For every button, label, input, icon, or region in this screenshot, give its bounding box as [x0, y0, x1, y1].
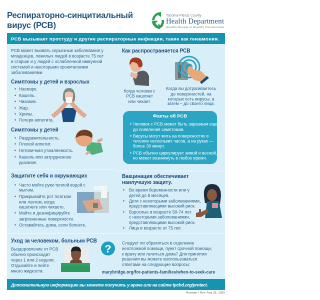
text: when to seek care: к врачу или лечиться дома? Для принятия	[122, 252, 207, 256]
panel: symptoms in infants: Кашель или затрудненное	[19, 154, 72, 160]
intro text: системой и некоторыми хроническими	[11, 64, 89, 70]
panel: symptoms in infants: •	[14, 136, 16, 140]
text: when to seek care: ответами на следующие вопросы:	[122, 262, 190, 267]
icon: baby	[76, 130, 103, 155]
caption: touching surfaces: Когда вы дотрагиваетесь	[166, 86, 217, 91]
divider	[7, 168, 116, 170]
panel: protect yourself: Прикрывайте рот платком	[19, 194, 71, 199]
panel: symptoms in infants	[11, 126, 103, 165]
panel: how RSV spreads	[122, 49, 217, 106]
panel: symptoms in children and adults: •	[14, 106, 16, 110]
panel: protect yourself: или локтем, когда	[19, 199, 55, 204]
panel: protect yourself: кашляете или чихаете.	[19, 204, 65, 210]
panel: symptoms in children and adults: •	[14, 86, 16, 92]
panel: protect yourself: Оставайтесь дома, если болеете.	[19, 222, 86, 228]
panel: symptoms in infants: •	[14, 142, 16, 146]
caption: coughing: или чихает.	[128, 99, 151, 104]
panel: caring for a person with RSV: Выздоровление от РСВ	[11, 246, 58, 252]
icon: question mark: ?	[105, 244, 112, 256]
panel: how RSV spreads: Как распространяется РСВ	[122, 49, 191, 55]
panel: symptoms in children and adults: •	[14, 118, 16, 122]
text: when to seek care: Следует ли обратиться в отделение	[122, 240, 195, 246]
logo: health department	[152, 12, 225, 29]
panel: protect yourself	[11, 173, 109, 228]
callout: RSV facts: •	[130, 134, 132, 138]
panel: vaccination: представляющими высокий риск.	[129, 220, 196, 225]
callout: RSV facts: Факты об РСВ	[153, 112, 188, 120]
text: when to seek care	[122, 240, 212, 267]
icon: hand washing	[77, 186, 109, 213]
panel: protect yourself: мылом.	[19, 188, 34, 193]
panel: vaccination: •	[123, 210, 125, 214]
panel: symptoms in children and adults: •	[14, 112, 16, 116]
icon: woman blowing nose	[51, 88, 87, 122]
callout: RSV facts: течение нескольких часов, а на руках —	[133, 138, 214, 144]
intro text: младенцев, пожилых людей в возрасте 75 лет	[11, 54, 104, 59]
panel: symptoms in infants: Симптомы у детей	[11, 126, 58, 134]
panel: symptoms in infants: •	[14, 154, 16, 160]
panel: vaccination: Дети с некоторыми заболеваниями,	[129, 198, 201, 204]
panel: symptoms in children and adults: Чихание.	[19, 99, 37, 104]
panel: caring for a person with RSV: много жидкости.	[11, 268, 44, 274]
caption: touching surfaces: затем – до своего лица.	[167, 101, 215, 106]
panel: vaccination: с некоторыми заболеваниями,	[129, 215, 190, 220]
logo: health department: Healthy People in Healthy Communities	[166, 25, 225, 29]
banner: footer: Дополнительную информацию вы можете получить у врача или на сайте tpchd.org/protect.	[10, 282, 208, 287]
callout: RSV facts: более 30 минут.	[133, 144, 165, 148]
panel: vaccination: наилучшую защиту.	[122, 180, 173, 186]
panel: background	[7, 44, 225, 290]
caption: coughing: Когда человек с	[124, 88, 156, 94]
panel: caring for a person with RSV: Уход за человеком, больным РСВ	[11, 238, 97, 245]
panel: vaccination: •	[123, 226, 125, 230]
caption: touching surfaces: до поверхностей, на	[171, 92, 212, 96]
logo: health department: Health Department	[166, 17, 225, 26]
title	[7, 10, 133, 30]
caption: coughing	[124, 88, 156, 104]
banner: headline	[7, 33, 225, 44]
intro text: РСВ может вызвать серьезные заболевания у	[11, 48, 104, 53]
banner: headline: РСВ вызывает простуду и другие респираторные инфекции, такие как пневмония.	[11, 36, 219, 42]
banner: footer	[7, 279, 225, 290]
panel: vaccination: Взрослые в возрасте 50-74 лет	[129, 210, 191, 214]
panel: protect yourself: •	[14, 210, 16, 216]
link: marybridge.org/for-patients-families/when-to-seek-care	[102, 270, 216, 274]
panel: symptoms in children and adults: •	[14, 99, 16, 104]
callout: RSV facts: до появления симптомов.	[133, 127, 184, 132]
panel: protect yourself: •	[14, 194, 16, 199]
panel: protect yourself: •	[14, 182, 16, 188]
callout: RSV facts: •	[130, 150, 132, 156]
callout: RSV facts: но может возникнуть в любое время.	[133, 156, 207, 160]
panel: protect yourself: •	[14, 222, 16, 228]
callout: RSV facts: РСВ обычно циркулирует зимой и весной,	[133, 150, 217, 156]
callout: RSV facts: Вирусы могут жить на поверхностях в	[133, 134, 209, 138]
text: when to seek care: решения вы можете воспользоваться	[122, 256, 198, 262]
panel: vaccination: Лица в возрасте от 75 лет.	[129, 226, 182, 230]
panel: vaccination: •	[123, 198, 125, 204]
panel: symptoms in infants: Раздражительность.	[19, 136, 60, 140]
intro text: заболеваниями.	[11, 70, 43, 75]
panel: symptoms in infants: дыхание.	[19, 160, 37, 165]
callout: RSV facts	[123, 111, 218, 164]
icon: hand touching door handle	[175, 56, 209, 84]
panel: vaccination: Во время беременности или у	[129, 188, 190, 192]
panel: vaccination: Вакцинация обеспечивает	[122, 173, 189, 180]
panel: symptoms in children and adults: Симптомы у детей и взрослых	[11, 79, 90, 86]
intro text: и старше и у людей с ослабленной иммунной	[11, 59, 103, 64]
panel: symptoms in infants: Плохой аппетит.	[19, 142, 51, 146]
divider	[116, 170, 225, 172]
icon: coughing person	[129, 58, 149, 86]
panel: caring for a person with RSV: обычно происходит	[11, 252, 50, 257]
divider	[7, 232, 225, 234]
panel: caring for a person with RSV: через 1 или 2 недели.	[11, 258, 55, 262]
icon: question mark	[101, 242, 115, 256]
title: Респираторно-синцитиальный	[7, 10, 133, 20]
panel: symptoms in children and adults: Насморк.	[19, 86, 37, 92]
footer note: Russian I Rev. Aug 26, 2025	[186, 290, 225, 294]
panel: vaccination	[122, 173, 222, 230]
caption: touching surfaces: которых есть вирусы, а	[168, 96, 215, 102]
panel: symptoms in children and adults: •	[14, 93, 16, 98]
caption: touching surfaces	[166, 86, 217, 106]
panel: caring for a person with RSV: Отдыхайте и пейте	[11, 263, 50, 268]
panel: symptoms in children and adults: Кашель.	[19, 93, 36, 98]
icon: woman with thumbs up	[196, 184, 222, 218]
panel: caring for a person with RSV	[11, 238, 97, 274]
panel: vaccination: детей до 8 месяцев.	[129, 193, 169, 198]
panel: protect yourself: Мойте и дезинфицируйте	[19, 210, 71, 216]
panel: vaccination: представляющими высокий риск.	[129, 204, 196, 208]
icon: person in bed	[61, 246, 90, 272]
intro text	[11, 48, 104, 75]
title: вирус (РСВ)	[7, 20, 56, 30]
panel: protect yourself: Часто мойте руки теплой водой с	[19, 182, 86, 188]
panel: protect yourself: Защитите себя и окружающих	[11, 173, 87, 180]
callout: RSV facts: •	[130, 122, 132, 126]
panel: symptoms in children and adults	[11, 79, 90, 122]
panel: vaccination: •	[123, 188, 125, 192]
panel: symptoms in children and adults: Жар.	[19, 106, 29, 110]
panel: symptoms in children and adults: Потеря аппетита.	[19, 118, 54, 122]
panel: symptoms in children and adults: Хрипы.	[19, 112, 33, 116]
logo: health department: Tacoma-Pierce County	[166, 13, 202, 17]
caption: coughing: РСВ кашляет	[126, 94, 153, 98]
text: when to seek care: неотложной помощи, пункт срочной помощи,	[122, 246, 212, 251]
callout: RSV facts: Человек с РСВ может быть заразным еще	[133, 122, 218, 126]
panel: symptoms in infants: •	[14, 148, 16, 153]
panel: symptoms in infants: Нетипичная утомляемость.	[19, 148, 74, 153]
panel: protect yourself: загрязненные поверхности.	[19, 216, 74, 221]
